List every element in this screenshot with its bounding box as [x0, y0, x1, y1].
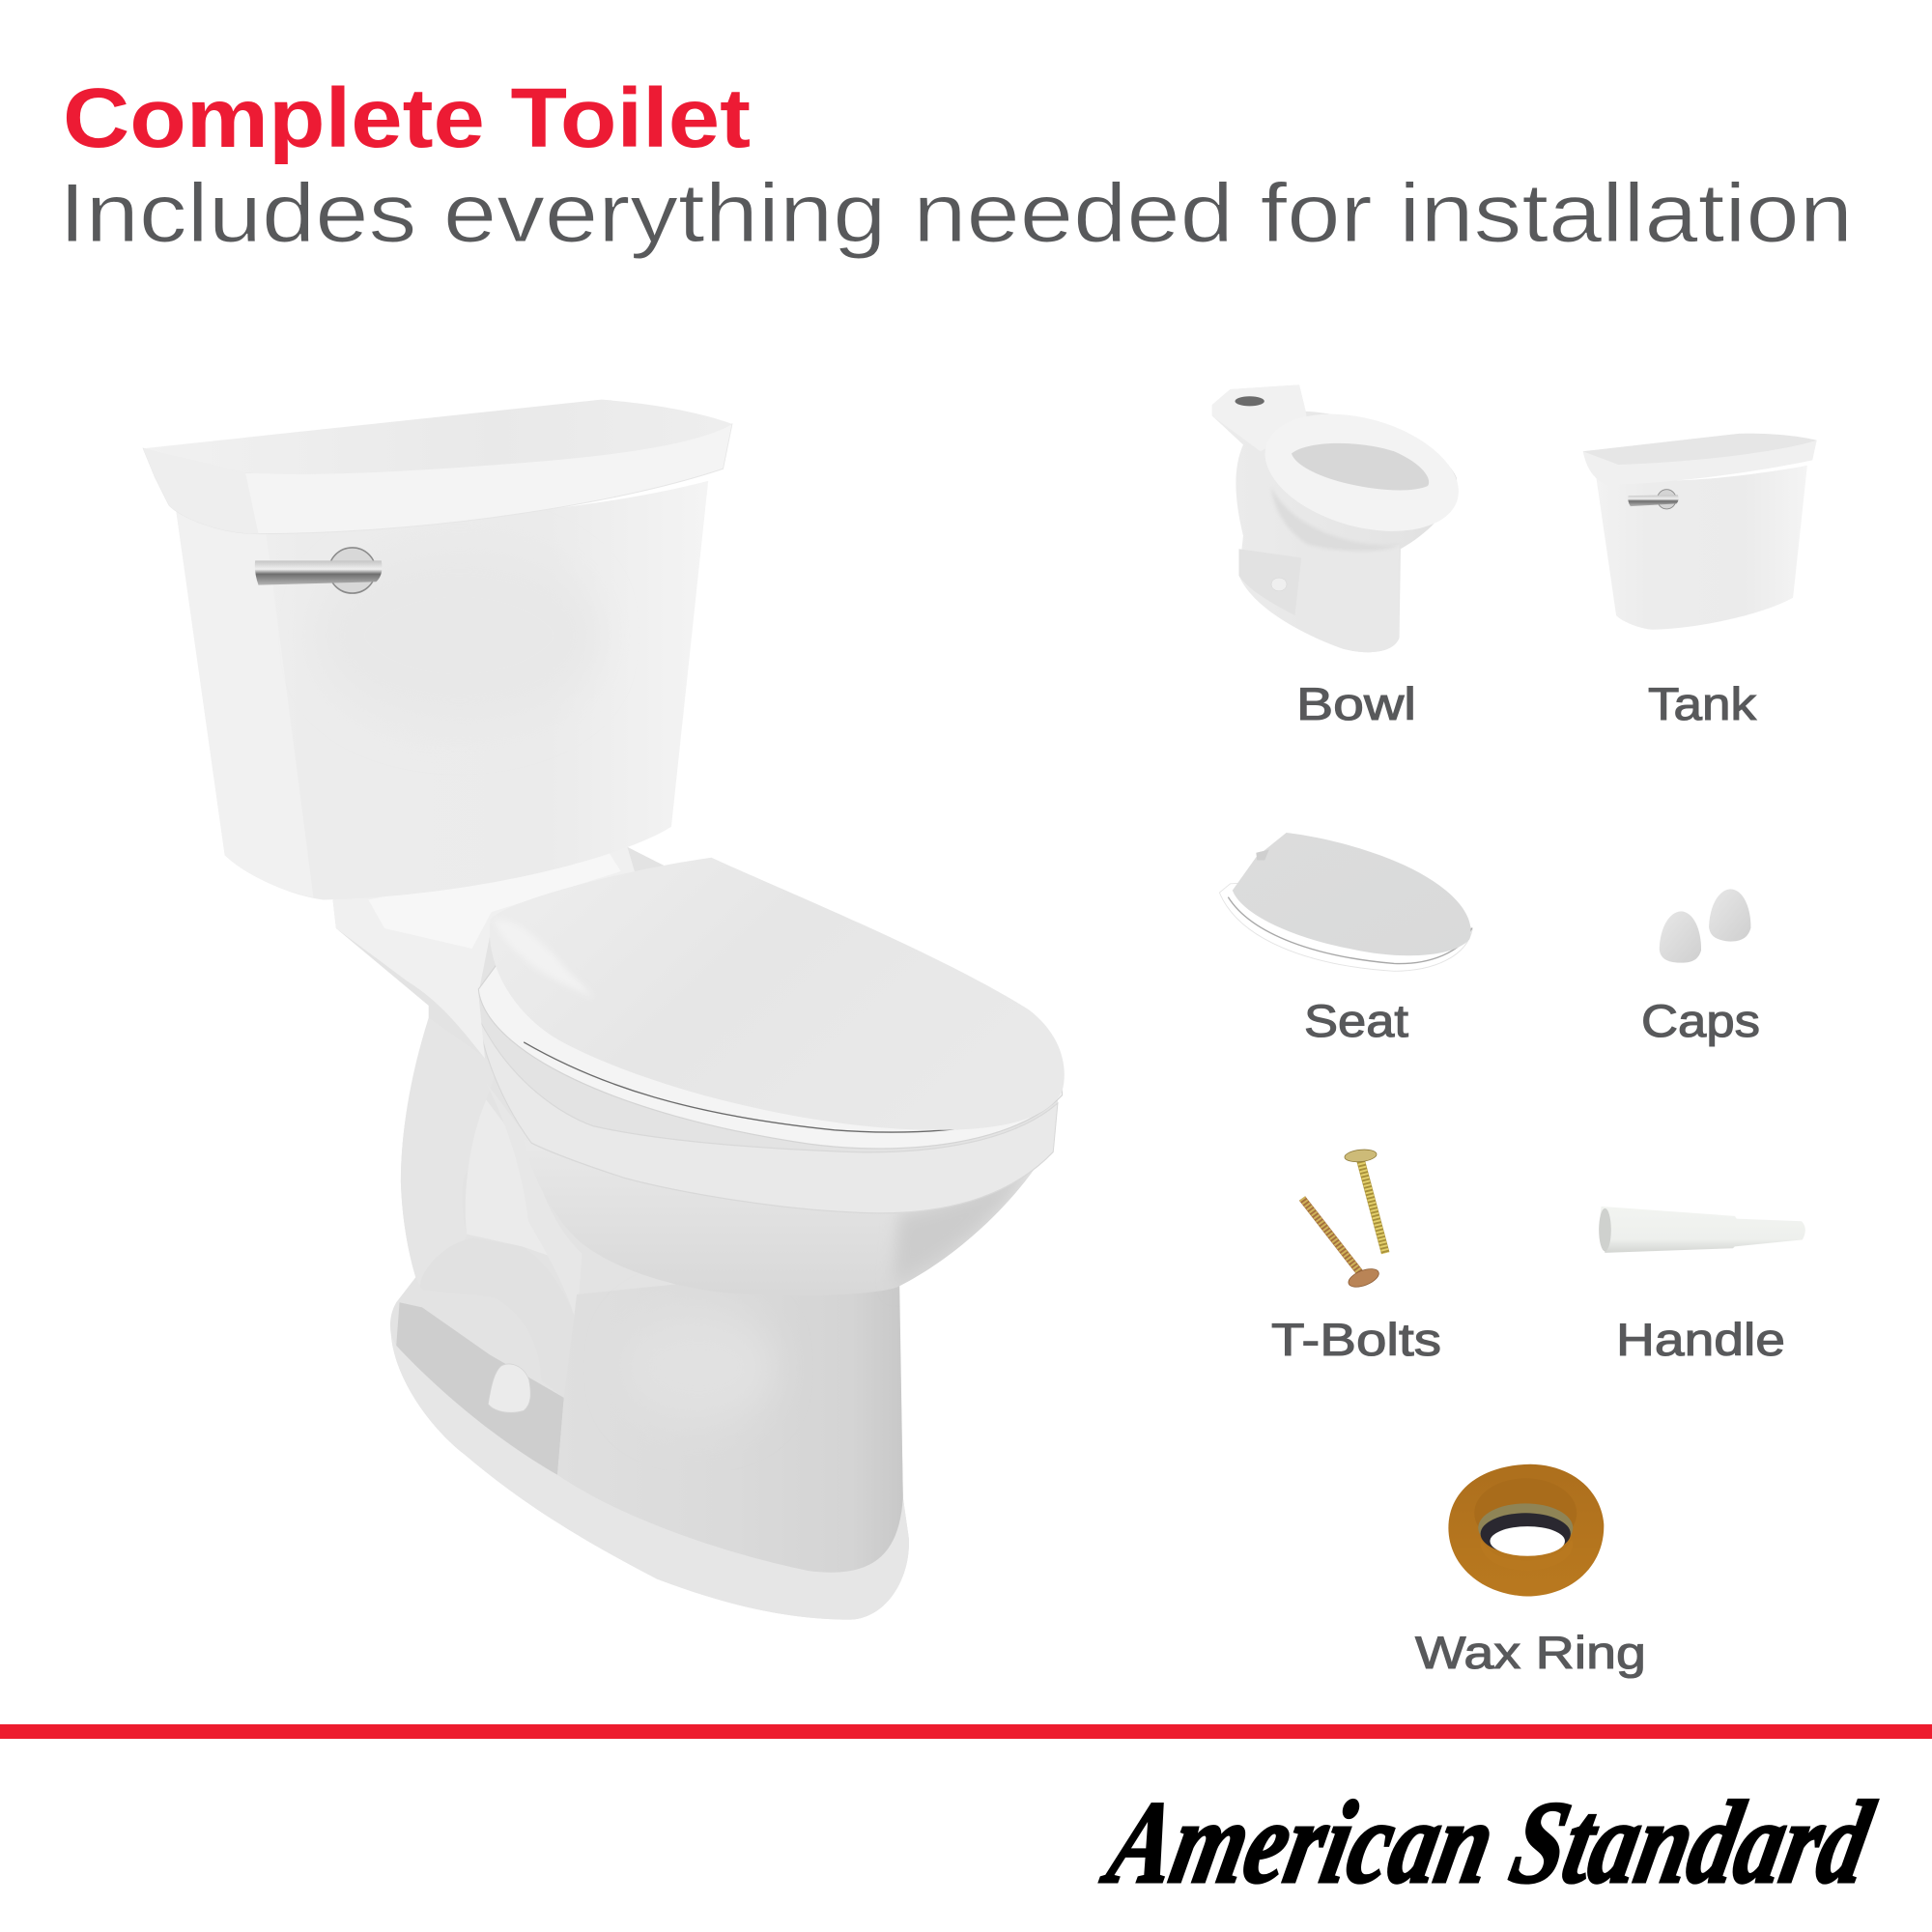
bowl foot — [1238, 549, 1301, 615]
tank soft shade — [317, 546, 602, 724]
rear cap — [1709, 889, 1750, 942]
tank lid top — [143, 400, 732, 474]
tank body — [176, 481, 708, 900]
neck highlight — [368, 851, 621, 949]
duct bend — [420, 1238, 577, 1398]
part: seat — [1219, 833, 1472, 971]
bowl cup — [524, 1136, 1055, 1295]
angled bolt shaft — [1302, 1198, 1362, 1276]
label: caps: Caps — [1641, 995, 1760, 1046]
bowl cup shade — [1271, 487, 1401, 552]
small handle disc — [1658, 490, 1676, 509]
seat underside — [1219, 877, 1472, 971]
handle disc — [329, 548, 376, 593]
neck to tank — [333, 847, 637, 1059]
label: wax ring: Wax Ring — [1415, 1627, 1646, 1678]
bowl deck — [1212, 384, 1308, 451]
part: wax ring — [1448, 1464, 1604, 1597]
bolt cap — [488, 1364, 530, 1412]
upright bolt shaft — [1359, 1155, 1385, 1253]
part: handle — [1599, 1207, 1805, 1253]
brass liner — [1478, 1503, 1573, 1552]
part: tank — [1583, 434, 1817, 630]
bowl opening — [1292, 443, 1429, 490]
handle opening — [1599, 1208, 1611, 1251]
deck hole — [1235, 396, 1264, 406]
flush handle — [255, 548, 382, 593]
part: t-bolts — [1302, 1149, 1385, 1291]
ring opening — [1490, 1526, 1565, 1556]
handle body — [1600, 1207, 1805, 1253]
rear trapway — [401, 1018, 497, 1290]
part: caps — [1660, 889, 1750, 963]
seat edge line — [1228, 897, 1472, 964]
angled bolt thread — [1302, 1198, 1362, 1276]
label: bowl: Bowl — [1296, 678, 1416, 729]
seat ring — [478, 936, 1063, 1149]
red divider bar — [0, 1724, 1932, 1739]
label: t-bolts: T-Bolts — [1271, 1314, 1441, 1365]
trapway recess — [466, 1100, 548, 1255]
handle lever — [255, 560, 382, 585]
upright bolt thread — [1359, 1155, 1385, 1253]
upright bolt head — [1344, 1149, 1378, 1163]
pedestal — [557, 1262, 903, 1573]
label: handle: Handle — [1616, 1314, 1785, 1365]
small tank lid — [1583, 434, 1817, 485]
wax ring inner slope — [1474, 1478, 1577, 1548]
tank left facet — [176, 507, 313, 897]
flat foot surface — [396, 1302, 564, 1475]
seat line — [524, 1042, 1025, 1132]
bowl side band — [486, 1083, 582, 1324]
seat hinge — [1256, 850, 1269, 861]
lid highlight — [493, 920, 595, 998]
wax lower lip — [1481, 1539, 1573, 1571]
tank lid side — [143, 424, 732, 534]
bowl pedestal light — [1299, 545, 1400, 652]
bowl shadow — [895, 1177, 1026, 1277]
rim band — [478, 1018, 1058, 1213]
part: bowl — [1212, 384, 1471, 652]
small tank lid top — [1583, 434, 1817, 465]
subtitle: Includes everything needed for installation — [59, 167, 1853, 260]
seat lid — [1233, 833, 1471, 955]
tank lid left facet — [143, 448, 259, 534]
bolt cap — [1271, 578, 1287, 591]
front cap — [1660, 911, 1701, 963]
pedestal soft light — [621, 1311, 777, 1425]
small tank body — [1596, 466, 1807, 630]
seat lid — [490, 858, 1065, 1130]
bowl silhouette — [1212, 384, 1457, 652]
small handle lever — [1628, 495, 1679, 506]
angled bolt head — [1346, 1265, 1381, 1291]
title: Complete Toilet — [63, 71, 751, 165]
base flange — [391, 1335, 909, 1620]
main toilet illustration — [143, 400, 1065, 1620]
wax ring outer — [1448, 1464, 1604, 1597]
bowl rim — [1252, 394, 1471, 552]
label: seat: Seat — [1304, 995, 1408, 1046]
dark gasket — [1481, 1513, 1571, 1554]
toilet body silhouette — [333, 847, 1061, 1620]
label: tank: Tank — [1648, 678, 1757, 729]
